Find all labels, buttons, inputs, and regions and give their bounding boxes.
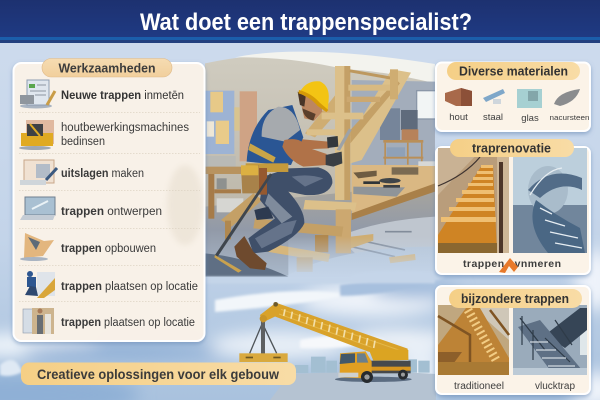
row: trappen plaatsen op locatie: trappen plaatsen op locatie <box>61 281 198 293</box>
caption: traditioneel: traditioneel <box>454 381 504 392</box>
central scene: stair specialist at work <box>205 52 445 283</box>
title: Wat doet een trappenspecialist? <box>140 9 472 36</box>
hard hat <box>300 81 329 111</box>
photo: steel stairs <box>513 305 587 375</box>
workbench deck with tools <box>352 161 435 263</box>
photo: spiral stairs <box>513 148 587 253</box>
heading pill: traprenovatie: traprenovatie <box>472 142 551 156</box>
wooden staircase frame <box>221 66 411 272</box>
material: natuursteen: nacursteen <box>550 113 590 122</box>
trousers <box>248 167 332 253</box>
truck body <box>335 348 412 383</box>
soft scene edge into sky <box>205 237 445 283</box>
boot <box>234 236 267 270</box>
gloves <box>326 152 342 167</box>
icon: orange arrow <box>499 258 518 273</box>
icon: drawing and pencil <box>20 160 57 185</box>
crane truck with load <box>239 302 430 383</box>
row: houtbewerkingsmachines bedinsen: houtbewerkingsmachines <box>61 122 189 134</box>
material: glas: glas <box>521 113 539 124</box>
row: trappen plaatsen op locatie (2) <box>23 308 195 334</box>
head <box>302 90 322 121</box>
caption: trappen vernieuwen: trappen vnmeren <box>463 258 561 270</box>
lifted load <box>239 320 288 362</box>
tool pouch <box>241 165 259 193</box>
row: trappen ontwerpen: trappen ontwerpen <box>61 206 162 218</box>
icon: laptop <box>20 197 55 220</box>
slogan banner: Creatieve oplossingen voor elk gebouw <box>37 366 279 382</box>
icon: clipboard <box>20 80 55 108</box>
title banner <box>0 0 600 43</box>
arms behind <box>287 138 329 150</box>
icon: woodworking machine <box>19 120 54 150</box>
icon: team on location <box>23 308 54 334</box>
faint scene show-through <box>167 165 203 245</box>
lattice boom <box>260 302 408 360</box>
worker <box>214 81 352 273</box>
row: houtbewerkingsmachines bedinsen: bedinsen <box>61 136 105 148</box>
heading pill: traprenovatie <box>450 139 574 157</box>
material: glas <box>517 89 542 124</box>
row: Neuwe trappen inmeten: Neuwe trappen inmetēn <box>61 90 184 102</box>
material: hout <box>445 88 472 123</box>
heading pill: Werkzaamheden <box>42 58 172 77</box>
row: trappen opbouwen <box>20 233 156 261</box>
arm <box>282 139 327 167</box>
row: trappen plaatsen op locatie <box>25 271 198 298</box>
room interior <box>205 52 437 277</box>
row: trappen plaatsen op locatie (2): trappen plaatsen op locatie <box>61 317 195 329</box>
panel: Diverse materialen <box>436 62 590 131</box>
photo: wooden stairs <box>438 148 509 253</box>
stair treads <box>221 193 373 272</box>
panel: bijzondere trappen <box>436 286 590 394</box>
photo: traditional stairs <box>438 305 509 375</box>
icon: stair plans <box>20 233 54 261</box>
row: trappen opbouwen: trappen opbouwen <box>61 243 156 255</box>
heading pill: Diverse materialen: Diverse materialen <box>459 64 568 78</box>
wall boards and shelves <box>205 91 423 219</box>
slogan banner <box>21 362 296 385</box>
caption: vlucktrap: vlucktrap <box>535 381 575 392</box>
material: staal <box>483 89 505 123</box>
panel: Werkzaamheden <box>14 58 204 341</box>
heading pill: Diverse materialen <box>447 62 580 80</box>
icon: worker installing stairs <box>25 271 55 298</box>
row: uitslagen maken <box>20 160 144 185</box>
row: trappen ontwerpen <box>20 197 162 220</box>
row: uitslagen maken: uitslagen maken <box>61 168 144 180</box>
panel: traprenovatie <box>436 139 590 274</box>
material: natuursteen <box>550 89 590 122</box>
heading pill: bijzondere trappen <box>449 289 582 308</box>
distant city skyline <box>295 357 430 373</box>
material: staal: staal <box>483 112 503 123</box>
row: houtbewerkingsmachines bedinsen <box>19 120 189 150</box>
heading pill: bijzondere trappen: bijzondere trappen <box>461 292 569 306</box>
city ground <box>270 372 436 400</box>
vest and shirt <box>247 105 303 165</box>
heading pill: Werkzaamheden: Werkzaamheden <box>58 62 156 76</box>
tool <box>337 128 352 151</box>
material: hout: hout <box>449 112 468 123</box>
row: Neuwe trappen inmeten <box>20 80 184 108</box>
